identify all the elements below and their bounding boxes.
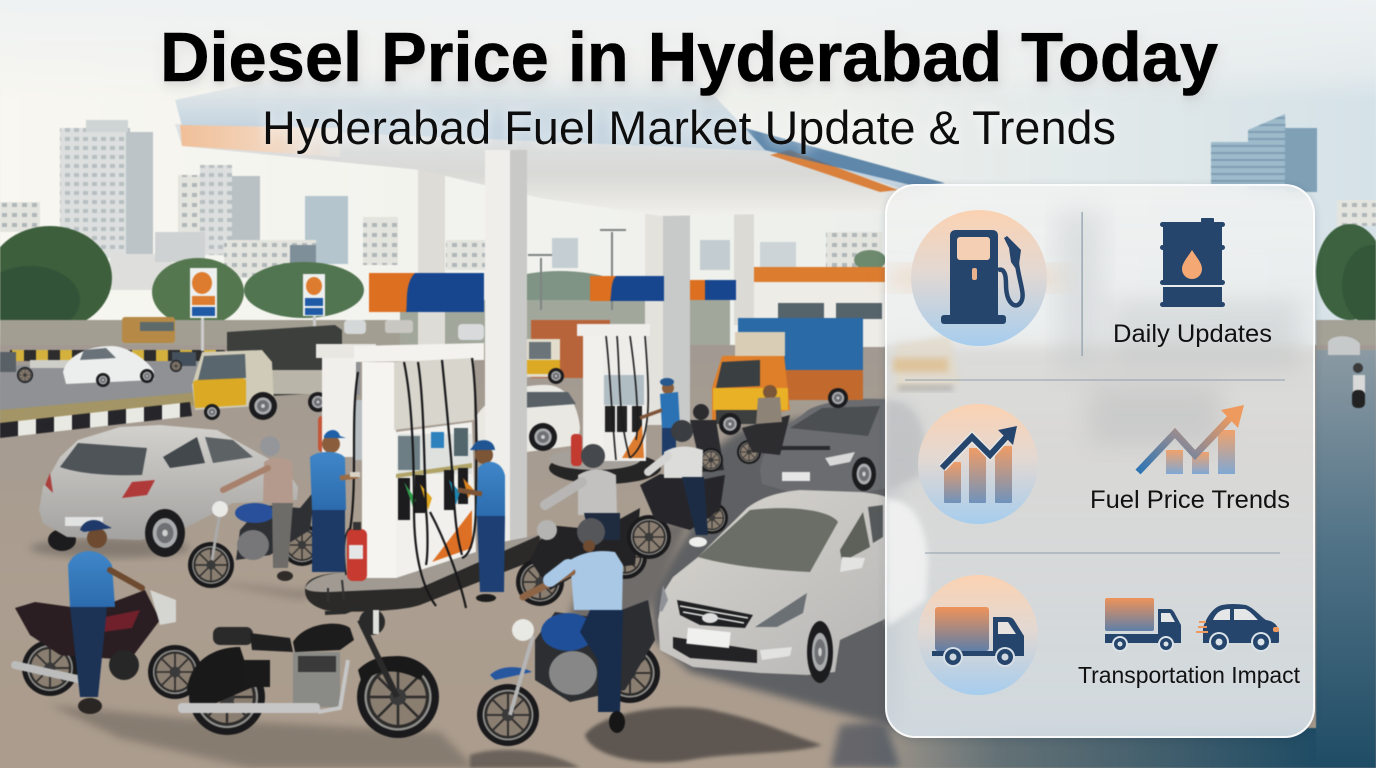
icon: car with speed lines — [1196, 604, 1279, 652]
icon: truck in disc — [918, 575, 1038, 695]
street lamps — [528, 230, 626, 310]
station signs — [190, 268, 325, 351]
white sedan — [477, 385, 580, 455]
label: transportation impact: Transportation Impact — [1078, 662, 1301, 688]
label: fuel price trends: Fuel Price Trends — [1090, 486, 1290, 514]
label: daily updates: Daily Updates — [1113, 320, 1272, 348]
silver sedan — [658, 490, 925, 683]
trees — [0, 224, 1376, 348]
far attendant — [640, 378, 680, 460]
far pump station 2 — [549, 324, 661, 484]
platform of pump 1 — [305, 535, 540, 612]
white shirt rider — [627, 420, 728, 559]
panel: fuel info icons — [911, 210, 1301, 695]
back columns — [418, 160, 754, 425]
background vehicles on road — [0, 317, 484, 387]
row: daily updates — [911, 210, 1272, 356]
red motorcycle with attendant — [15, 520, 202, 714]
rider on blue bike behind — [188, 436, 323, 588]
far background haze strip and wall — [0, 320, 400, 346]
glass panel — [885, 184, 1315, 738]
subtitle: Hyderabad Fuel Market Update & Trends — [262, 101, 1116, 154]
back pump 1 — [316, 344, 376, 460]
city skyline buildings — [0, 114, 1376, 290]
front rider on blue bike — [477, 518, 660, 746]
canopy — [175, 60, 945, 216]
sky — [0, 0, 1376, 360]
title: Diesel Price in Hyderabad Today — [160, 18, 1218, 96]
grey car — [760, 399, 922, 494]
grey shirt rider — [516, 444, 647, 606]
fascia sign 2 — [590, 276, 736, 301]
fascia sign big — [369, 273, 484, 312]
main column — [485, 150, 527, 542]
row: transportation impact — [918, 575, 1301, 695]
yellow pickup truck — [192, 325, 342, 420]
right-bottom dark teal wash — [860, 728, 1316, 768]
silver hatchback — [30, 425, 298, 558]
distant building of station — [753, 267, 885, 347]
attendant with tablet — [310, 430, 360, 572]
black Enfield motorcycle — [178, 580, 439, 738]
row: fuel price trends — [918, 404, 1290, 524]
road median barriers — [0, 350, 225, 438]
icon: small truck — [1105, 598, 1181, 652]
icon: fuel pump in disc — [911, 210, 1047, 346]
icon: trend in disc — [918, 404, 1038, 524]
top haze behind title — [0, 0, 1376, 100]
right road scene — [1316, 336, 1376, 768]
orange container truck behind — [527, 320, 610, 384]
red extinguisher far — [318, 416, 582, 466]
divider — [1082, 212, 1083, 356]
orange and blue truck — [712, 318, 863, 435]
red extinguisher near — [344, 522, 367, 581]
ground and road — [0, 345, 1376, 768]
icon: oil barrel — [1160, 218, 1225, 307]
icon: trend arrow with bars — [1138, 405, 1244, 474]
frosted ghost reflections in panel — [887, 212, 1300, 625]
attendant at pump — [458, 440, 505, 602]
rider behind orange truck and parked bikes — [690, 385, 790, 472]
main pump dispenser — [350, 343, 484, 608]
